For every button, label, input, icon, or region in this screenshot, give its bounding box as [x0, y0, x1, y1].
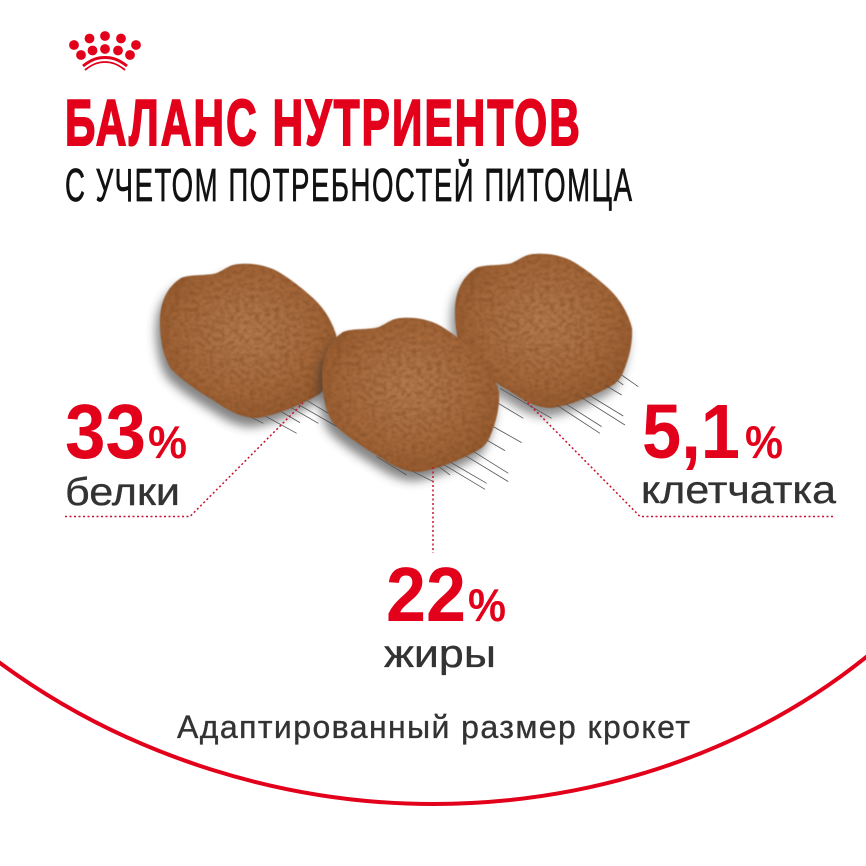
title: БАЛАНС НУТРИЕНТОВ: [65, 86, 580, 159]
stat: fiber 5,1%: клетчатка: [641, 469, 836, 512]
caption: Адаптированный размер крокет: [177, 709, 690, 745]
logo: royal crown: [69, 31, 141, 70]
kibble illustration: [156, 254, 638, 489]
stat: protein 33%: 33: [65, 389, 146, 475]
kibble shadow lines: right: [498, 375, 638, 433]
stat: protein 33%: %: [148, 416, 187, 468]
subtitle: С УЧЕТОМ ПОТРЕБНОСТЕЙ ПИТОМЦА: [65, 157, 633, 212]
stat: fat 22%: %: [468, 579, 506, 631]
stat: protein 33%: белки: [65, 471, 180, 514]
kibble: middle: [318, 318, 522, 489]
stat: fiber 5,1%: %: [745, 416, 783, 468]
stat: fiber 5,1%: [641, 389, 836, 512]
stat: fat 22%: 22: [386, 552, 466, 638]
red arc: [0, 654, 866, 804]
stat: fat 22%: [384, 552, 506, 676]
kibble: left: [156, 264, 340, 433]
kibble: right: [451, 254, 632, 417]
dotted leader lines: [65, 400, 833, 553]
stat: protein 33%: [65, 389, 187, 514]
stat: fat 22%: жиры: [384, 633, 496, 676]
stat: fiber 5,1%: 5,1: [642, 389, 740, 475]
